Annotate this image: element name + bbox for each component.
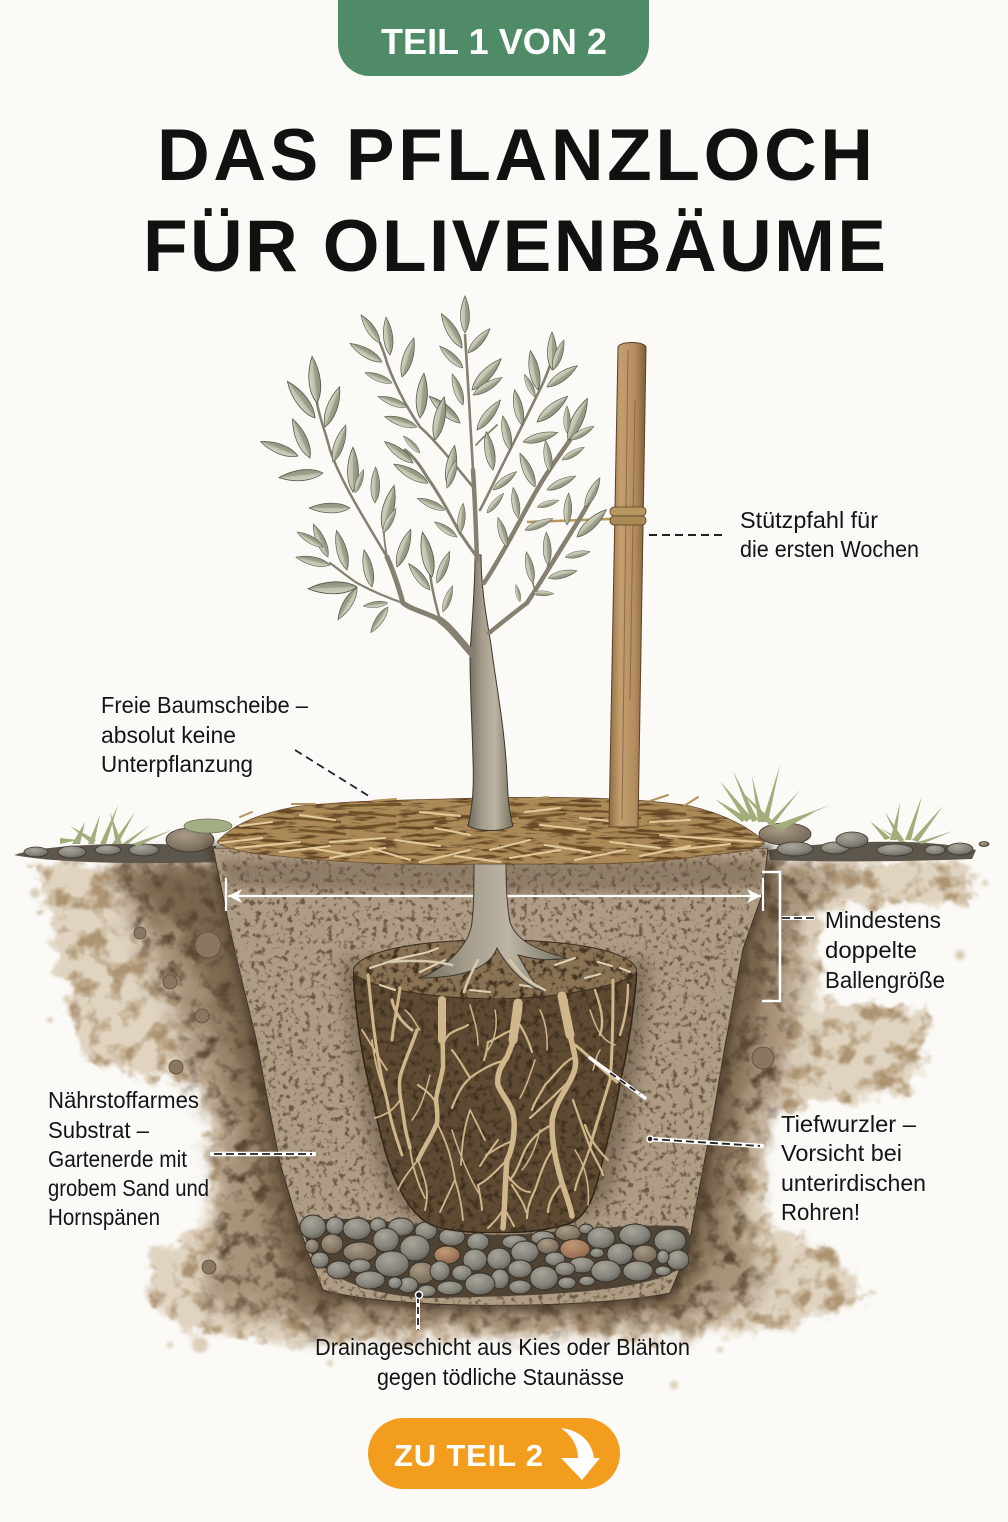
diameter arrow [226, 878, 763, 911]
grass tufts [60, 765, 953, 846]
roots [362, 975, 628, 1228]
title [143, 115, 886, 287]
annotation: nutrient-poor substrate: Substrat – [48, 1117, 149, 1143]
annotation: deep roots warning [590, 1058, 926, 1225]
branches [317, 335, 590, 655]
lower trunk and root crown [390, 860, 567, 992]
surrounding soil [30, 860, 988, 1389]
annotation: deep roots warning: Rohren! [781, 1199, 860, 1225]
annotation: drainage layer: gegen tödliche Staunässe [377, 1364, 624, 1390]
annotation: drainage layer [315, 1292, 690, 1390]
annotation: free tree disc: Unterpflanzung [101, 751, 253, 777]
surface rocks [14, 819, 989, 863]
tie rope [527, 507, 646, 525]
pale paint blotches [30, 880, 988, 1389]
button: to part 2: ZU TEIL 2 [394, 1438, 543, 1473]
annotation: nutrient-poor substrate: grobem Sand und [48, 1175, 209, 1201]
annotation: nutrient-poor substrate: Hornspänen [48, 1204, 160, 1230]
annotation: support stake: die ersten Wochen [740, 536, 919, 562]
annotation: free tree disc [101, 692, 372, 798]
support stake with tie [527, 342, 646, 827]
annotation: deep roots warning: unterirdischen [781, 1170, 926, 1196]
header badge: part 1 of 2 [338, 0, 649, 76]
annotation: support stake: Stützpfahl für [740, 507, 878, 533]
stray straw [240, 795, 698, 817]
annotation: deep roots warning: Vorsicht bei [781, 1140, 902, 1166]
annotation: nutrient-poor substrate: Gartenerde mit [48, 1146, 188, 1172]
annotation: minimum twice root ball size: doppelte [825, 937, 917, 963]
mulch layer [217, 795, 765, 865]
title: FÜR OLIVENBÄUME [143, 206, 886, 287]
annotation: free tree disc: absolut keine [101, 722, 236, 748]
leaves [259, 296, 610, 635]
shadow around root ball [342, 960, 650, 1236]
drainage gravel layer [300, 1215, 691, 1298]
annotation: support stake [649, 507, 919, 562]
title: DAS PFLANZLOCH [157, 115, 873, 196]
dark straw [245, 804, 740, 858]
soil pebbles [134, 927, 774, 1274]
root flecks on ball top [370, 948, 630, 992]
annotation: nutrient-poor substrate: Nährstoffarmes [48, 1087, 199, 1113]
button: to part 2 [368, 1418, 620, 1489]
annotation: minimum twice root ball size: Mindestens [825, 907, 941, 933]
header badge: part 1 of 2: TEIL 1 VON 2 [381, 21, 607, 62]
annotation: minimum twice root ball size [762, 872, 945, 1001]
planting pit with substrate [213, 848, 768, 1305]
olive tree crown [259, 296, 610, 655]
light straw [220, 808, 760, 862]
upper trunk [468, 555, 513, 830]
annotation: deep roots warning: Tiefwurzler – [781, 1111, 916, 1137]
annotation: drainage layer: Drainageschicht aus Kies oder Blähton [315, 1334, 690, 1360]
icon: curved down arrow [561, 1428, 600, 1480]
annotation: minimum twice root ball size: Ballengröße [825, 967, 945, 993]
root ball [353, 940, 637, 1233]
annotation: free tree disc: Freie Baumscheibe – [101, 692, 308, 718]
annotation: nutrient-poor substrate [48, 1087, 314, 1230]
